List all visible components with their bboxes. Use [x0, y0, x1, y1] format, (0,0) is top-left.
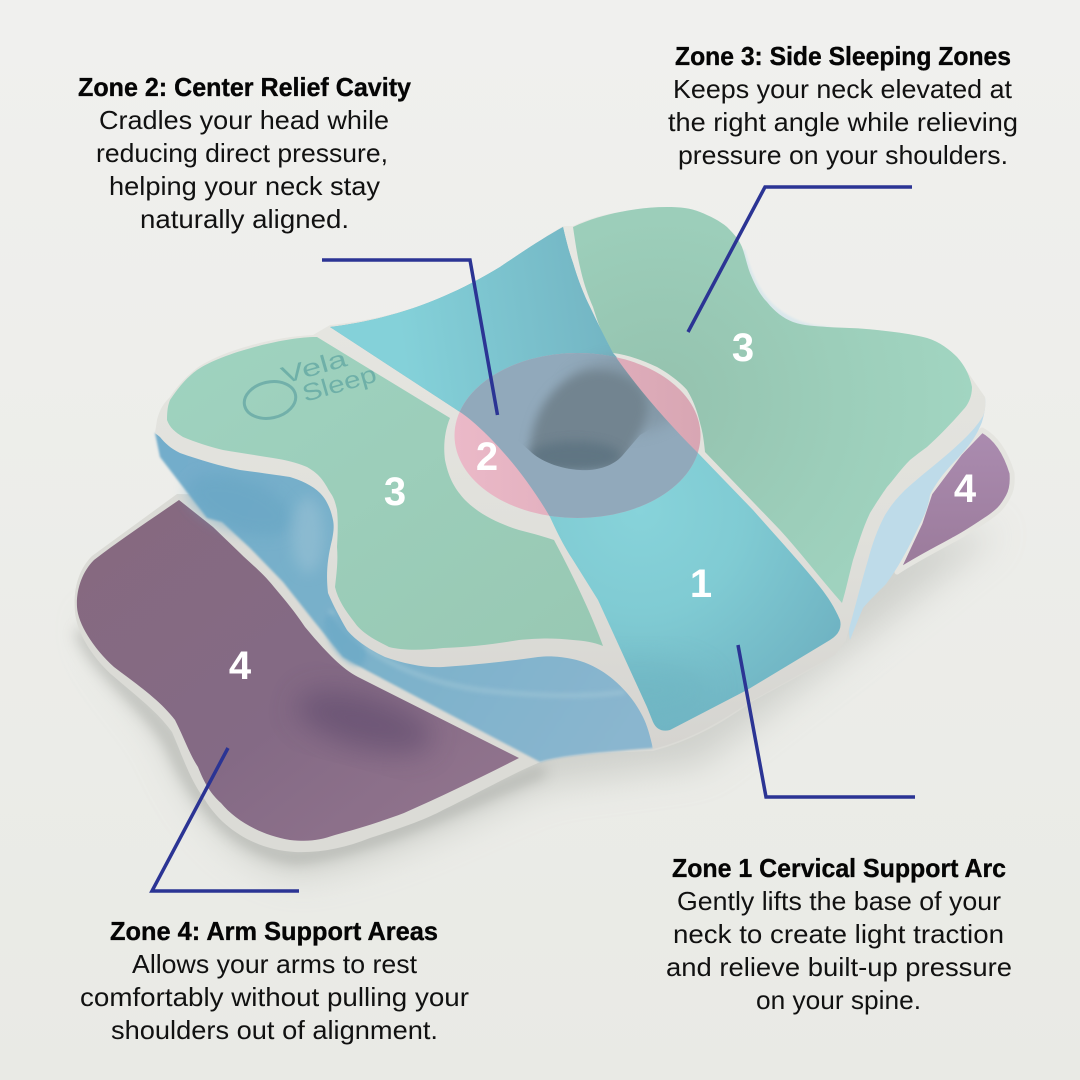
zone 3: left side sleeping zone	[167, 337, 603, 650]
text block: zone 3: pressure on your shoulders.	[678, 140, 1008, 170]
zone 2: center relief cavity	[454, 353, 700, 518]
text block: zone 4: comfortably without pulling your	[80, 982, 469, 1012]
text block: zone 1: neck to create light traction	[673, 919, 1004, 949]
pillow ground shadow	[80, 530, 1000, 875]
number 3: 3	[732, 326, 754, 370]
text block: zone 1	[666, 853, 1012, 1015]
top surface edge	[155, 207, 985, 749]
text block: zone 1: Zone 1 Cervical Support Arc	[672, 853, 1006, 883]
callout line: zone 3	[688, 187, 912, 332]
text block: zone 2: Zone 2: Center Relief Cavity	[78, 72, 412, 102]
number 4 left: 4	[229, 644, 252, 688]
text block: zone 2: helping your neck stay	[109, 171, 380, 201]
text block: zone 1: on your spine.	[756, 985, 921, 1015]
pillow illustration	[75, 207, 1012, 875]
text block: zone 1: and relieve built-up pressure	[666, 952, 1012, 982]
logo: Vela Sleep: Sleep	[299, 361, 380, 408]
text block: zone 2: naturally aligned.	[140, 204, 349, 234]
side foam: right pale blue	[742, 250, 985, 640]
text block: zone 2: reducing direct pressure,	[96, 138, 388, 168]
text block: zone 4: Zone 4: Arm Support Areas	[110, 916, 438, 946]
zone 4: left arm support area	[77, 500, 519, 841]
text block: zone 2	[78, 72, 412, 234]
text block: zone 4	[80, 916, 469, 1045]
text block: zone 3: the right angle while relieving	[668, 107, 1018, 137]
text block: zone 3	[668, 41, 1018, 170]
side foam: left blue	[155, 430, 660, 762]
callout line: zone 4	[152, 748, 299, 891]
number 2: 2	[476, 435, 498, 479]
number 1: 1	[690, 562, 712, 606]
text block: zone 4: shoulders out of alignment.	[111, 1015, 438, 1045]
pillow base edge	[75, 494, 843, 852]
cavity hole	[529, 371, 648, 471]
text block: zone 2: Cradles your head while	[99, 105, 389, 135]
zone 4: right arm support area	[897, 430, 1012, 572]
logo: Vela Sleep: Vela	[278, 345, 351, 390]
text block: zone 1: Gently lifts the base of your	[677, 886, 1001, 916]
callout line: zone 1	[738, 645, 915, 797]
text block: zone 3: Keeps your neck elevated at	[673, 74, 1013, 104]
number 4 right: 4	[954, 467, 977, 511]
callout line: zone 2	[322, 260, 498, 415]
number 3: 3	[384, 470, 406, 514]
zone 3: right side sleeping zone	[573, 207, 972, 603]
logo: Vela Sleep	[241, 345, 380, 423]
text block: zone 4: Allows your arms to rest	[132, 949, 418, 979]
zone 1: center support band	[330, 227, 841, 731]
text block: zone 3: Zone 3: Side Sleeping Zones	[675, 41, 1011, 71]
